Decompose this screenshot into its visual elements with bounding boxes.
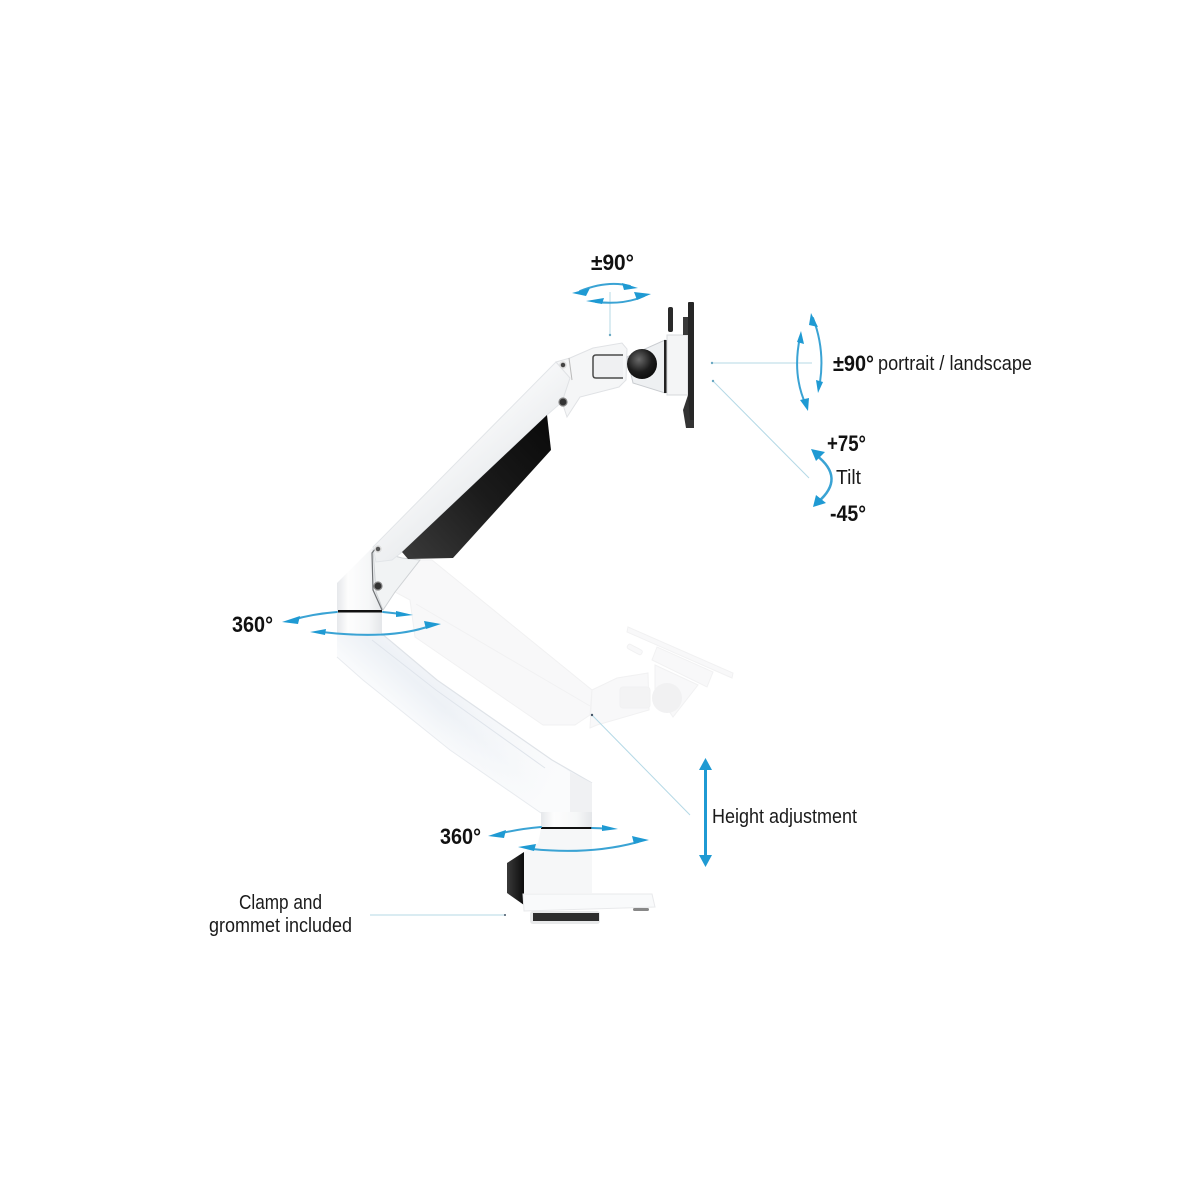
callout line: portrait landscape [711, 362, 812, 364]
label: elbow 360: 360° [232, 612, 273, 637]
arrow: top swivel [572, 283, 651, 304]
label: height adjustment: Height adjustment [712, 806, 857, 828]
label: portrait landscape: ±90° [833, 351, 874, 376]
label: tilt down: -45° [830, 501, 866, 526]
arm: elbow bracket [373, 550, 420, 610]
label: clamp and grommet: Clamp and [239, 892, 322, 914]
label: tilt up: +75° [827, 431, 866, 456]
arrow: height adjustment [699, 758, 712, 867]
arrow: elbow 360 [282, 611, 441, 635]
label: clamp and grommet [209, 892, 352, 937]
monitor head: tilt wedge [627, 340, 665, 393]
arm: elbow bracket edge [372, 548, 382, 610]
arrow: tilt [811, 449, 832, 507]
clamp: base plate [523, 894, 655, 924]
arrow: rotation [797, 313, 823, 411]
monitor head: ball joint [627, 349, 657, 379]
callout line: clamp [370, 914, 506, 916]
arm: base column [524, 812, 592, 893]
arm: pivot screws [374, 362, 567, 590]
arm: elbow column [337, 548, 382, 633]
callout line: height [591, 714, 690, 815]
monitor head: VESA plate [664, 302, 694, 428]
label: base 360: 360° [440, 824, 481, 849]
label: tilt: Tilt [836, 467, 861, 489]
arm: black cover [402, 415, 551, 559]
callout line: top swivel [609, 292, 611, 336]
monitor head: swivel link [556, 343, 627, 417]
arm: lower forearm [337, 633, 592, 830]
label: portrait landscape: portrait / landscape [878, 353, 1032, 375]
label: portrait landscape [833, 351, 1032, 376]
ghost arm: lowered position [395, 560, 733, 728]
label: top swivel: ±90° [591, 250, 634, 275]
arrow: base 360 [488, 825, 649, 851]
arm: upper arm [373, 362, 572, 562]
clamp: black side block [507, 852, 524, 905]
label: clamp and grommet: grommet included [209, 915, 352, 937]
callout line: tilt [712, 380, 809, 478]
